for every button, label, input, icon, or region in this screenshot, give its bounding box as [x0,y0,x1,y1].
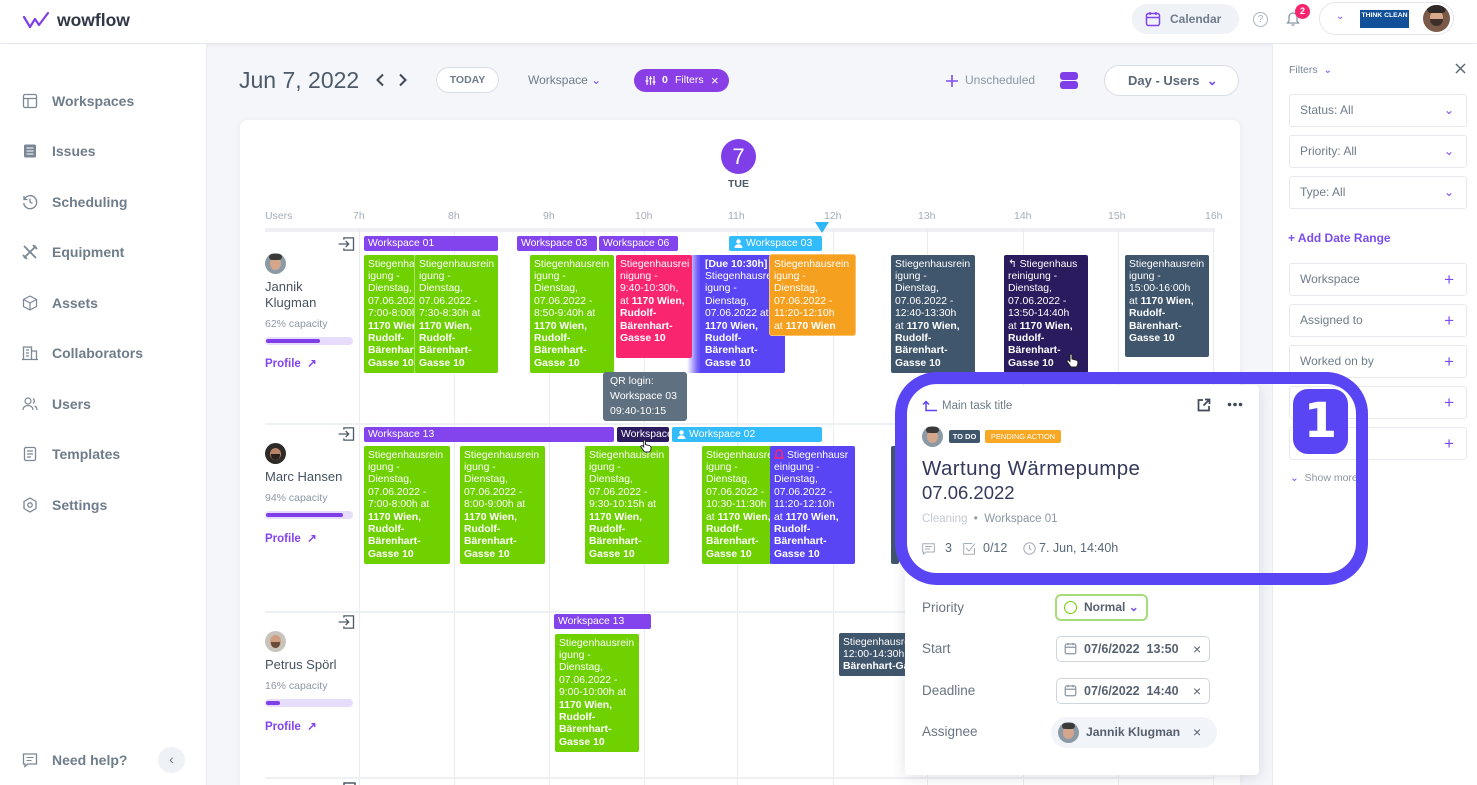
status tag: pending action: PENDING ACTION [991,432,1055,441]
time axis: 16h [1205,210,1223,222]
row 1 workspace bars: Workspace 01 [368,238,434,249]
calendar panel [240,120,1240,785]
row 1 tasks: 15:00-16:00h [1129,283,1190,294]
row 2 workspace bars: Workspace 13 [368,429,434,440]
row 2 tasks: 8:00-9:00h at [464,499,525,510]
calendar button: Calendar [1170,12,1221,26]
number badge 1 [1293,389,1348,454]
row 1 tasks: Stiegenhausrein [774,258,849,270]
row 1 tasks: ↰ Stiegenhaus [1008,258,1077,270]
filter pill: 0 [662,74,668,86]
today button: TODAY [450,74,485,86]
filter: status: Status: All [1300,103,1353,117]
row 2 tasks: 1170 Wien, [589,512,642,523]
help icon [1253,12,1268,27]
show more: ⌄ Show more [1290,472,1358,484]
row 1 tasks: Gasse 10 [1129,333,1175,344]
filter: worked on by: + [1444,352,1454,371]
row 2 tasks: Bärenhart- [368,536,421,547]
row 2 tasks: Bärenhart- [589,536,642,547]
row 2 tasks: 07.06.2022 - [464,487,522,498]
priority field: Normal ⌄ [1084,600,1139,614]
row 2 tasks: Gasse 10 [368,549,414,560]
cursor: hand on task [1066,354,1078,368]
row 1 tasks: at 1170 Wien, [1008,321,1073,332]
date badge: 7 [732,144,745,169]
capacity bar 62% [265,337,353,345]
unscheduled: Unscheduled [965,73,1035,87]
filter: workspace [1289,263,1467,296]
nav: Issues [24,143,96,159]
row 1 tasks: 07.06.2022 - [419,296,477,307]
row 1 tasks: at 1170 Wien, [1129,296,1194,307]
row 3 slate task [839,633,909,676]
row 1 workspace bars: Workspace 03 [521,238,587,249]
row 2 tasks: Rudolf- [589,524,625,535]
time axis: 7h [353,210,365,222]
row 1 workspace bars: Workspace 06 [603,238,669,249]
nav: Issues: Issues [52,143,96,159]
row 3 green task: Rudolf- [559,712,595,723]
row 1 tasks: igung - [368,271,400,282]
time axis: 12h [824,210,842,222]
filter: priority [1289,135,1467,168]
capacity bar 16% [265,699,353,707]
row 2 tasks: Dienstag, [774,474,818,485]
row 1 tasks: Stiegenhausrei [620,258,689,270]
start field: × [1193,641,1201,657]
deadline field: × [1193,683,1201,699]
filter: priority: ⌄ [1444,144,1454,158]
highlight outline [895,372,1368,585]
row 2 tasks: 07.06.2022 - [368,487,426,498]
time axis: Users [265,210,292,222]
row 1 tasks: nigung - [620,271,658,282]
status tag: to do [949,430,980,443]
row 1 tasks: 07.06.2022 - [534,296,592,307]
nav: Settings [23,497,107,513]
row 3 green task: 9:00-10:00h at [559,687,626,698]
logo: wowflow [57,10,130,30]
filters panel [1272,44,1477,785]
row 1 tasks [364,254,1209,421]
row 2 tasks: 1170 Wien, [464,512,517,523]
row 2 tasks: at 1170 Wien, [774,512,839,523]
row 1 tasks: at 1170 Wien, [620,296,685,307]
row 1 tasks: 07.06.2022 - [1008,296,1066,307]
filter: worked on by [1289,345,1467,378]
filter: assigned to [1289,304,1467,337]
filter: workspace: + [1444,270,1454,289]
row 1 tasks: reinigung - [1008,271,1057,282]
row 3 slate task: 12:00-14:30h [843,649,904,660]
filters heading: Filters ⌄ [1289,64,1332,76]
row 2 workspace bars [364,427,822,442]
open task icon [1197,398,1211,412]
login icon [338,615,354,629]
row 2 tasks: Rudolf- [706,524,742,535]
date arrows [376,74,407,86]
start field: 07/6/2022 13:50 [1084,642,1179,656]
row 2 tasks: Stiegenhausr [787,450,848,460]
row 2 tasks: 11:20-12:10h [774,499,834,510]
deadline field: Deadline [922,683,975,698]
row 1 workspace bars: Workspace 03 [746,238,812,249]
row 2 tasks [364,446,899,564]
capacity bar 94% [265,511,353,519]
notification bell: 2 [1300,6,1305,16]
account switcher: THINK CLEAN [1361,12,1408,19]
row 2 tasks: igung - [464,462,496,473]
nav: Equipment: Equipment [52,244,124,260]
row 1 tasks: igung - [419,271,451,282]
logo [22,10,130,30]
row 3 green task: 07.06.2022 - [559,675,617,686]
row 2 tasks: Gasse 10 [706,549,752,560]
filter: status: ⌄ [1444,103,1454,117]
cursor: hand on workspace [640,440,652,452]
row 2 tasks: Rudolf- [368,524,404,535]
filter: hidden row: + [1444,393,1454,412]
task title: Wartung Wärmepumpe [922,457,1140,480]
task popup [905,385,1259,775]
row 1 tasks: 07.06.2022 - [895,296,953,307]
row 1 tasks: Rudolf- [895,333,931,344]
calendar button [1132,4,1239,34]
row 1 tasks: Dienstag, [1008,283,1052,294]
row 1 tasks: Stiegenhausrein [534,258,609,270]
start field [922,636,1210,662]
priority field [922,594,1148,621]
name [265,279,316,310]
login icon [338,237,354,251]
row 2 tasks: Bärenhart- [706,536,759,547]
row 1 tasks: Rudolf- [1008,333,1044,344]
row 1 tasks: Bärenhart- [895,345,948,356]
highlighted task summary [922,398,1242,555]
row 2 tasks: 07.06.2022 - [589,487,647,498]
nav: Scheduling: Scheduling [52,194,127,210]
row 2 tasks: Gasse 10 [589,549,635,560]
task meta: 7. Jun, 14:40h [1039,541,1118,555]
filter: worked on by: Worked on by [1300,354,1374,368]
name: Petrus Spörl [265,657,337,672]
row 3 green task: Bärenhart- [559,724,612,735]
row 1 tasks: at 1170 Wien [774,321,836,332]
filter: hidden row [1289,427,1467,460]
row 1 tasks: QR login: [610,375,654,387]
row 2 tasks: Dienstag, [706,474,750,485]
task meta: 3 [945,541,952,555]
nav: Workspaces: Workspaces [52,93,134,109]
row 2 tasks: 1170 Wien, [368,512,421,523]
row 2 tasks: 07.06.2022 - [774,487,832,498]
row 1 tasks: 9:40-10:30h, [620,283,678,294]
filter: hidden row [1289,386,1467,419]
filter: status [1289,94,1467,127]
row 1 tasks: Rudolf- [419,333,455,344]
row 1 tasks: Stiegenhausrein [895,258,970,270]
row 2 tasks: at 1170 Wien, [706,512,771,523]
row 3 green task: Gasse 10 [559,737,605,748]
time axis: 10h [635,210,653,222]
more menu icon [1227,402,1243,407]
row 1 tasks: Bärenhart- [534,345,587,356]
row 1 tasks: Workspace 03 [610,390,677,402]
row 3 green task: igung - [559,650,591,661]
workspace dropdown: Workspace ⌄ [528,73,601,87]
filter: workspace: Workspace [1300,272,1360,286]
avatar [265,443,286,464]
row 1 tasks: Dienstag, [705,296,749,307]
row 3 green task: Dienstag, [559,662,603,673]
row 2 workspace bars: Workspace 02 [689,429,755,440]
time axis: 9h [543,210,555,222]
row 2 tasks: Stiegenhausrein [464,450,539,460]
assignee avatar [922,426,943,447]
row 2 tasks: 07.06.2022 - [706,487,764,498]
user: Petrus Spörl [265,615,354,733]
account switcher: ⌄ [1336,11,1344,22]
row 1 tasks: at 1170 Wien, [895,321,960,332]
row 1 tasks: Rudolf- [368,333,404,344]
time axis: 15h [1108,210,1126,222]
row 2 tasks: Gasse 10 [774,549,820,560]
notification bell [1286,4,1310,26]
row 2 tasks: igung - [589,462,621,473]
row 2 tasks: igung - [368,462,400,473]
sidebar [0,44,207,785]
filter: type [1289,176,1467,209]
nav: Need help: ‹ [169,751,174,767]
row 2 tasks: Dienstag, [589,474,633,485]
task meta: 0/12 [983,541,1007,555]
row 2 tasks: einigung - [774,462,820,473]
row 1 tasks: Rudolf- [534,333,570,344]
deadline field [922,678,1210,704]
today button [436,67,499,93]
filter: assigned to: + [1444,311,1454,330]
row 1 tasks: Bärenhart- [419,345,472,356]
profile link: Profile ↗ [265,533,317,545]
filter pill [634,69,729,92]
row 1 tasks: 07.06.2022 at [705,308,769,319]
row 1 tasks: Gasse 10 [895,358,941,369]
filter: hidden row: + [1444,434,1454,453]
filter: assigned to: Assigned to [1300,313,1363,327]
nav: Templates: Templates [52,446,120,462]
filter: priority: Priority: All [1300,144,1357,158]
row 2 tasks: Stiegenhausrein [368,450,443,460]
row 1 tasks: Gasse 10 [620,333,666,344]
header bar [0,0,1477,43]
day label: TUE [728,178,749,190]
row 3 workspace bar [554,614,651,629]
time axis: 13h [918,210,936,222]
row 1 tasks: Gasse 10 [368,358,414,369]
capacity 62%: 62% capacity [265,318,327,330]
row 3 green task: 1170 Wien, [559,700,612,711]
nav: Users: Users [52,396,91,412]
row 1 tasks: Dienstag, [774,283,818,294]
filter: type: ⌄ [1444,185,1454,199]
nav: Collaborators: Collaborators [52,345,143,361]
row 1 tasks: Stiegenhausrein [419,258,494,270]
row 1 tasks: Dienstag, [368,283,412,294]
row 2 tasks: Rudolf- [464,524,500,535]
row 1 tasks: Rudolf- [620,308,656,319]
row 2 tasks: Bärenhart- [464,536,517,547]
filter pill: × [711,73,719,88]
status tag: to do: TO DO [953,432,976,441]
deadline field: 07/6/2022 14:40 [1084,684,1179,698]
row 1 tasks: 09:40-10:15 [610,405,666,417]
row 1 tasks: igung - [1129,271,1161,282]
row 1 tasks: Bärenhart- [1008,345,1061,356]
row 1 tasks: Dienstag, [895,283,939,294]
filters close [1456,64,1466,74]
row 1 tasks: 1170 Wien, [419,321,472,332]
row 1 tasks: 12:40-13:30h [895,308,956,319]
row 1 tasks: Bärenhart- [620,321,673,332]
row 3 green task: Stiegenhausrein [559,638,634,648]
profile link: Profile ↗ [265,721,317,733]
row 2 tasks: Gasse 10 [464,549,510,560]
row 1 tasks: Rudolf- [1129,308,1165,319]
row 1 tasks: igung - [534,271,566,282]
row 1 tasks: Bärenhart- [1129,321,1182,332]
start field: Start [922,641,951,656]
row 2 tasks: Bärenhart- [774,536,827,547]
date heading: Jun 7, 2022 [239,67,359,93]
assignee field [922,717,1217,748]
row 1 tasks: Stiegenhausrein [705,271,780,282]
nav: Settings: Settings [52,497,107,513]
row 2 tasks: Rudolf- [774,524,810,535]
capacity 16%: 16% capacity [265,680,327,692]
status tag: pending action [985,430,1061,443]
row 1 tasks: igung - [895,271,927,282]
row 1 tasks: Gasse 10 [705,358,751,369]
row 4 login icon [343,782,356,785]
time axis: 14h [1014,210,1032,222]
current time marker [815,222,829,233]
row 1 tasks: 8:50-9:40h at [534,308,595,319]
row 1 tasks: [Due 10:30h] [705,258,767,270]
task meta [922,541,1122,556]
main task title: Main task title [942,400,1012,412]
filter pill: Filters [675,74,704,86]
nav: Assets [22,295,98,311]
row 1 tasks: 1170 Wien, [705,321,758,332]
nav: Users [22,396,91,412]
account switcher [1319,2,1454,35]
name: Jannik [265,279,303,294]
row 2 tasks: 7:00-8:00h at [368,499,429,510]
filter: type: Type: All [1300,185,1345,199]
view toggle icon [1060,72,1078,89]
row 2 tasks: 10:30-11:30h [706,499,766,510]
row 2 tasks: Dienstag, [368,474,412,485]
user: Jannik Klugman [265,237,354,370]
time axis: 8h [448,210,460,222]
assignee field: Jannik Klugman [1086,725,1180,739]
profile link: Profile ↗ [265,358,317,370]
day-users dropdown [1104,65,1239,96]
row 1 tasks: 11:20-12:10h [774,308,834,319]
assignee field: × [1193,724,1201,740]
row 2 tasks: Stiegenhausrein [589,450,664,460]
date badge [721,139,756,174]
nav: Need help [22,747,185,773]
row 1 tasks: igung - [774,271,806,282]
row 1 tasks: Bärenhart- [705,345,758,356]
task category: Cleaning • Workspace 01 [922,513,1058,525]
day-users dropdown: Day - Users ⌄ [1128,73,1218,88]
time axis: 11h [728,210,745,222]
row 2 tasks: igung - [706,462,738,473]
row 1 tasks: 7:30-8:30h at [419,308,480,319]
nav: Need help: Need help? [52,752,127,768]
row 2 tasks: 9:30-10:15h at [589,499,656,510]
row 1 tasks: Dienstag, [534,283,578,294]
row 1 tasks: Gasse 10 [419,358,465,369]
task date: 07.06.2022 [922,482,1015,503]
number badge 1: 1 [1304,393,1337,449]
row 2 tasks: Dienstag, [464,474,508,485]
avatar [265,631,286,652]
time axis [265,210,1223,222]
row 1 workspace bars [364,236,822,251]
row 1 tasks: Stiegenhausrein [1129,258,1204,270]
name: Marc Hansen [265,469,342,484]
row 1 tasks: Gasse 10 [534,358,580,369]
row 1 tasks: Rudolf- [705,333,741,344]
row 3 green task [555,634,639,752]
row 1 tasks: 13:50-14:40h [1008,308,1069,319]
assignee field: Assignee [922,724,978,739]
name: Klugman [265,295,316,310]
capacity 94%: 94% capacity [265,492,327,504]
row 1 tasks: Gasse 10 [1008,358,1054,369]
avatar [265,253,286,274]
row 1 tasks: 1170 Wien, [534,321,587,332]
user: Marc Hansen [265,427,354,545]
add date range: + Add Date Range [1288,231,1391,245]
row 3 workspace bar: Workspace 13 [558,616,624,627]
priority field: Priority [922,600,964,615]
row 1 tasks: Dienstag, [419,283,463,294]
help icon: ? [1258,14,1263,25]
row 1 tasks: 07.06.2022 - [774,296,832,307]
login icon [338,427,354,441]
nav: Assets: Assets [52,295,98,311]
row 1 tasks: igung - [705,283,737,294]
